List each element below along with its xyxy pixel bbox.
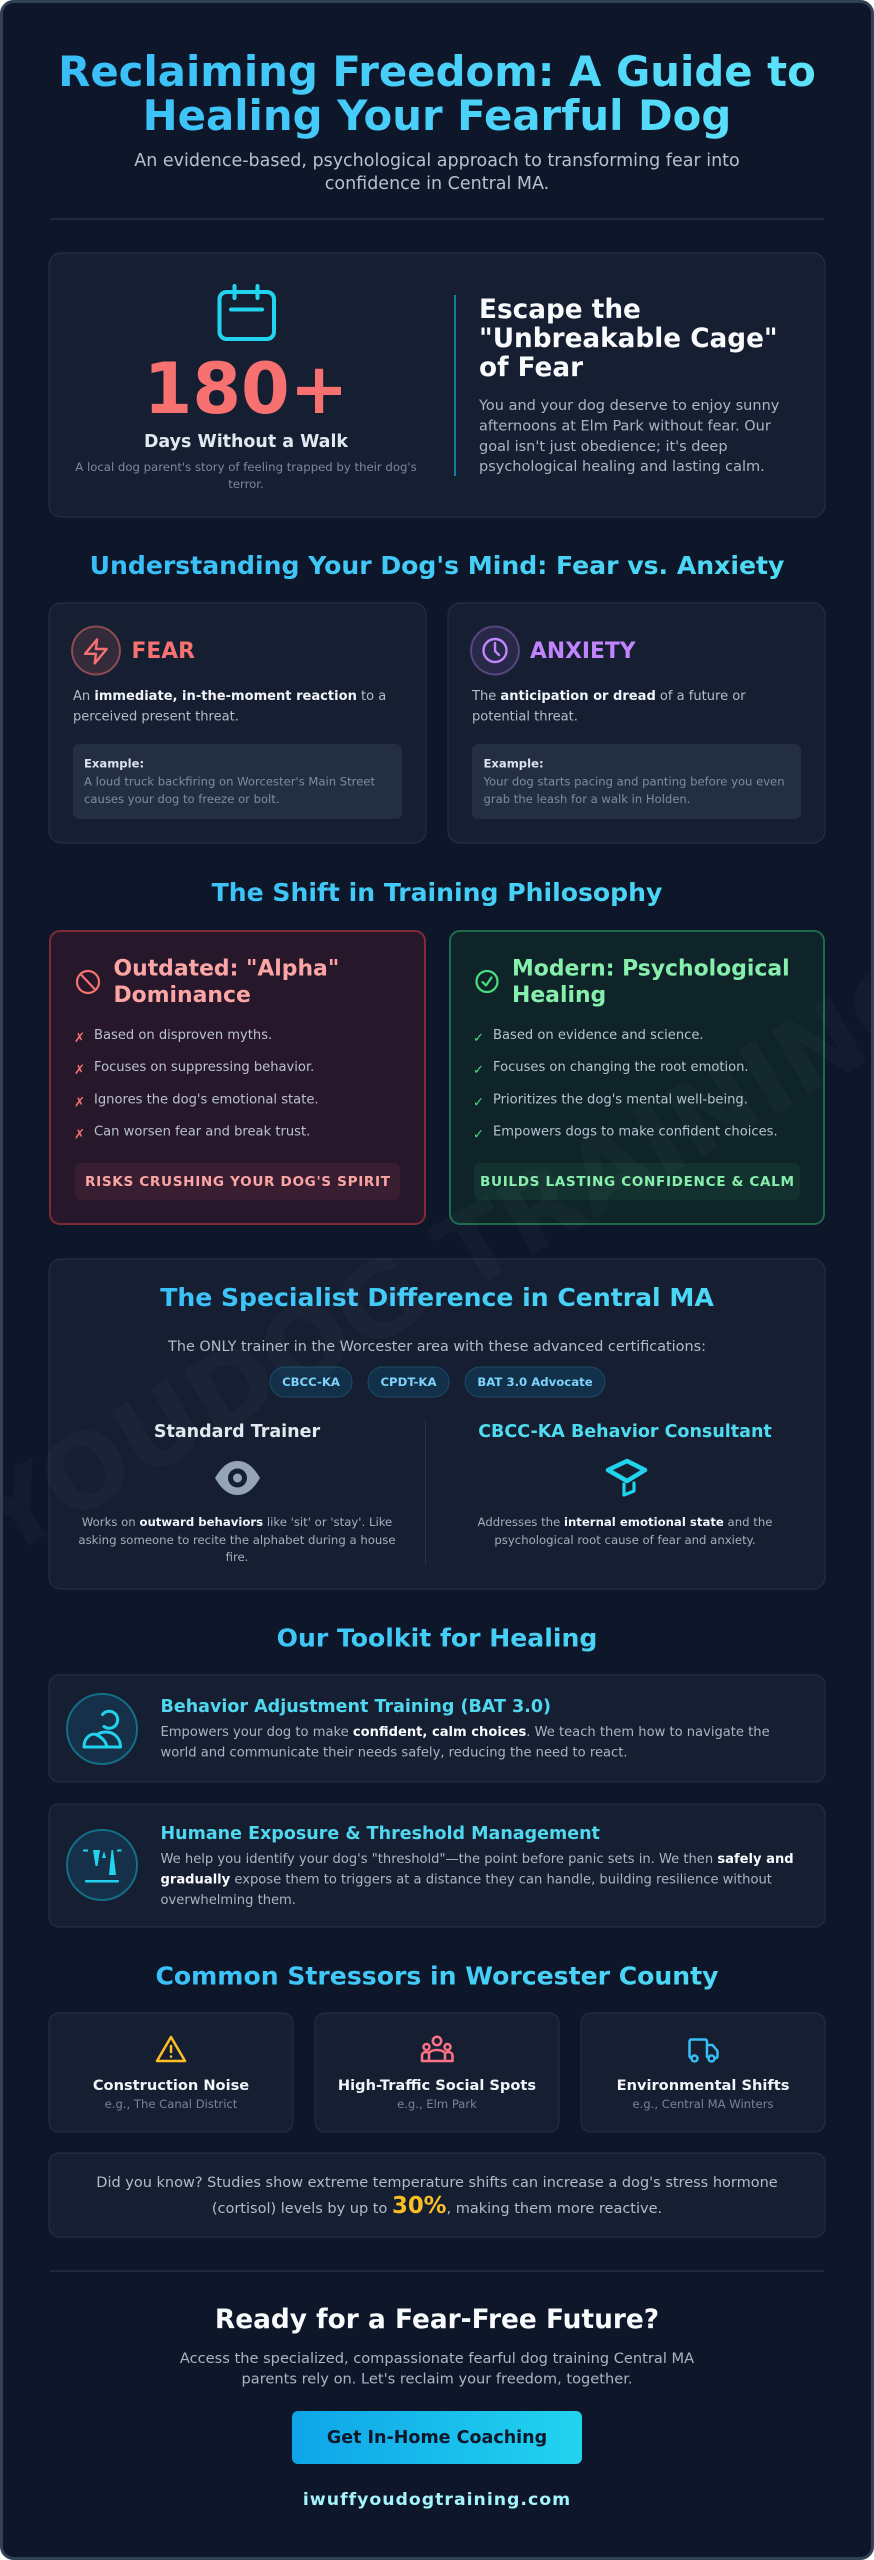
modern list: Prioritizes the dog's mental well-being. xyxy=(493,1092,748,1108)
card: social spots: e.g., Elm Park xyxy=(397,2097,477,2111)
icon: threshold xyxy=(67,1830,137,1900)
title: Healing Your Fearful Dog xyxy=(143,91,731,140)
fear example: causes your dog to freeze or bolt. xyxy=(84,792,280,806)
hero heading: of Fear xyxy=(479,353,583,383)
heading: training philosophy: The Shift in Training Philosophy xyxy=(212,878,662,907)
hero heading: "Unbreakable Cage" xyxy=(479,324,778,354)
outdated heading: Outdated: "Alpha" xyxy=(114,956,339,982)
exposure description xyxy=(160,1852,794,1908)
outdated verdict xyxy=(75,1163,400,1200)
hero heading: Escape the xyxy=(479,295,641,325)
certification badges xyxy=(270,1367,605,1397)
heading: stressors: Common Stressors in Worcester County xyxy=(155,1962,719,1990)
stat note: A local dog parent's story of feeling trapped by their dog's xyxy=(75,460,417,474)
fear example: A loud truck backfiring on Worcester's Main Street xyxy=(84,774,375,788)
BAT description: world and communicate their needs safely, reducing the need to react. xyxy=(160,1746,628,1760)
panel: specialist difference xyxy=(49,1259,825,1589)
fear definition xyxy=(73,689,386,724)
cross marks: ✗ xyxy=(74,1128,85,1142)
icon: eye xyxy=(215,1461,260,1495)
outdated list xyxy=(94,1028,319,1140)
outdated heading: Dominance xyxy=(114,983,251,1008)
BAT description: Empowers your dog to make confident, calm choices. We teach them how to navigate the xyxy=(160,1725,770,1740)
icon: calendar xyxy=(220,286,274,339)
standard trainer column xyxy=(78,1422,396,1564)
check marks: ✓ xyxy=(473,1063,484,1078)
modern list: Focuses on changing the root emotion. xyxy=(493,1060,749,1075)
card: environmental shifts: Environmental Shifts xyxy=(617,2077,789,2094)
anxiety example: grab the leash for a walk in Holden. xyxy=(484,792,690,806)
anxiety example: Example: xyxy=(484,756,544,770)
header xyxy=(58,47,816,194)
card: construction noise: Construction Noise xyxy=(93,2077,249,2094)
modern verdict xyxy=(474,1163,800,1200)
CTA text: Access the specialized, compassionate fearful dog training Central MA xyxy=(180,2350,694,2367)
title: Reclaiming Freedom: A Guide to xyxy=(58,47,816,96)
subtitle: confidence in Central MA. xyxy=(325,174,549,194)
certification intro: The ONLY trainer in the Worcester area with these advanced certifications: xyxy=(167,1339,706,1355)
heading: fear vs anxiety: Understanding Your Dog's Mind: Fear vs. Anxiety xyxy=(90,551,784,580)
outdated heading xyxy=(114,956,339,1008)
check marks xyxy=(473,1031,484,1142)
modern heading: Healing xyxy=(512,983,606,1008)
cross marks: ✗ xyxy=(74,1031,85,1046)
exposure title: Humane Exposure & Threshold Management xyxy=(160,1824,600,1844)
heading: toolkit: Our Toolkit for Healing xyxy=(277,1624,597,1652)
outdated list: Can worsen fear and break trust. xyxy=(94,1124,310,1140)
anxiety example: Your dog starts pacing and panting before you even xyxy=(482,774,785,788)
panel: did you know: (cortisol) levels by up to 30%, making them more reactive. xyxy=(212,2193,662,2219)
hero paragraph: You and your dog deserve to enjoy sunny xyxy=(478,398,780,414)
panel: anxiety xyxy=(448,603,825,843)
standard trainer column: fire. xyxy=(226,1550,248,1564)
certification badges: CBCC-KA xyxy=(282,1375,340,1389)
outdated verdict: RISKS CRUSHING YOUR DOG'S SPIRIT xyxy=(85,1174,391,1190)
anxiety definition xyxy=(471,689,746,724)
cross marks xyxy=(74,1031,85,1142)
divider xyxy=(454,295,456,476)
icon: group xyxy=(422,2037,452,2061)
check marks: ✓ xyxy=(473,1128,484,1142)
behavior consultant column xyxy=(478,1422,772,1547)
certification badges: CPDT-KA xyxy=(380,1375,437,1389)
CTA text: parents rely on. Let's reclaim your freedom, together. xyxy=(242,2370,632,2388)
CTA text xyxy=(180,2350,694,2388)
anxiety label: ANXIETY xyxy=(530,639,636,664)
anxiety definition: potential threat. xyxy=(472,710,578,724)
modern list: Based on evidence and science. xyxy=(493,1028,704,1043)
card: social spots: High-Traffic Social Spots xyxy=(338,2077,536,2094)
website link: iwuffyoudogtraining.com xyxy=(303,2490,571,2510)
icon: truck xyxy=(690,2040,718,2062)
icon: person circle xyxy=(67,1694,137,1764)
subtitle xyxy=(134,151,740,194)
CTA button xyxy=(292,2411,582,2464)
anxiety example xyxy=(472,744,801,819)
hero paragraph: goal isn't just obedience; it's deep xyxy=(479,439,728,455)
outdated list: Ignores the dog's emotional state. xyxy=(94,1092,319,1108)
stat note xyxy=(75,460,417,491)
icon: graduation cap xyxy=(608,1461,645,1495)
panel: modern psychological healing xyxy=(450,931,824,1224)
exposure description: We help you identify your dog's "threshold"—the point before panic sets in. We then safely and xyxy=(160,1852,794,1867)
icon: warning xyxy=(157,2037,185,2061)
icon: lightning xyxy=(72,626,120,674)
BAT description xyxy=(160,1725,770,1760)
panel: outdated alpha dominance xyxy=(50,931,425,1224)
exposure description: gradually expose them to triggers at a distance they can handle, building resilience without xyxy=(160,1872,772,1888)
modern list xyxy=(493,1028,778,1140)
CTA button: Get In-Home Coaching xyxy=(327,2428,547,2448)
panel: hero statistic xyxy=(49,253,825,517)
fear definition: perceived present threat. xyxy=(73,710,239,724)
BAT title: Behavior Adjustment Training (BAT 3.0) xyxy=(160,1697,551,1717)
icon: clock xyxy=(471,626,519,674)
card: construction noise xyxy=(49,2013,293,2132)
modern verdict: BUILDS LASTING CONFIDENCE & CALM xyxy=(480,1174,794,1190)
card: environmental shifts xyxy=(581,2013,825,2132)
icon: ban xyxy=(77,971,99,993)
call to action xyxy=(180,2304,694,2510)
panel: humane exposure xyxy=(49,1804,825,1927)
standard trainer column: asking someone to recite the alphabet during a house xyxy=(78,1533,396,1547)
panel: did you know: Did you know? Studies show extreme temperature shifts can increase a dog's stress hormone xyxy=(96,2175,778,2191)
modern list: Empowers dogs to make confident choices. xyxy=(493,1124,778,1140)
anxiety definition: The anticipation or dread of a future or xyxy=(471,689,746,704)
hero paragraph: psychological healing and lasting calm. xyxy=(479,459,765,475)
hero paragraph: afternoons at Elm Park without fear. Our xyxy=(479,418,771,434)
stat note: terror. xyxy=(228,477,264,491)
card: social spots xyxy=(315,2013,559,2132)
CTA heading: Ready for a Fear-Free Future? xyxy=(215,2304,659,2335)
cross marks: ✗ xyxy=(74,1096,85,1110)
fear definition: An immediate, in-the-moment reaction to a xyxy=(73,689,386,704)
standard trainer column: Standard Trainer xyxy=(154,1422,320,1442)
outdated list: Focuses on suppressing behavior. xyxy=(94,1060,314,1075)
outdated list: Based on disproven myths. xyxy=(94,1028,272,1043)
behavior consultant column: CBCC-KA Behavior Consultant xyxy=(478,1422,772,1442)
icon: check circle xyxy=(476,971,498,992)
hero heading xyxy=(479,295,778,383)
modern heading: Modern: Psychological xyxy=(512,956,790,982)
stat label: Days Without a Walk xyxy=(144,432,348,452)
behavior consultant column: psychological root cause of fear and anxiety. xyxy=(494,1533,756,1547)
behavior consultant column: Addresses the internal emotional state and the xyxy=(478,1515,772,1529)
modern heading xyxy=(512,956,790,1008)
fear example: Example: xyxy=(84,756,144,770)
card: environmental shifts: e.g., Central MA Winters xyxy=(632,2097,774,2111)
panel: BAT 3.0 xyxy=(49,1675,825,1782)
subtitle: An evidence-based, psychological approach to transforming fear into xyxy=(134,151,740,171)
cross marks: ✗ xyxy=(74,1063,85,1078)
fear example xyxy=(73,744,402,819)
title xyxy=(58,47,816,140)
check marks: ✓ xyxy=(473,1031,484,1046)
card: construction noise: e.g., The Canal District xyxy=(105,2097,238,2111)
panel: fear xyxy=(49,603,426,843)
fear label: FEAR xyxy=(132,639,195,664)
check marks: ✓ xyxy=(473,1096,484,1110)
standard trainer column: Works on outward behaviors like 'sit' or 'stay'. Like xyxy=(82,1515,392,1529)
specialist heading: The Specialist Difference in Central MA xyxy=(160,1283,714,1312)
stat: 180+: 180+ xyxy=(144,348,348,430)
exposure description: overwhelming them. xyxy=(160,1893,296,1908)
panel: did you know xyxy=(49,2153,825,2237)
hero paragraph xyxy=(478,398,780,475)
certification badges: BAT 3.0 Advocate xyxy=(477,1375,593,1389)
